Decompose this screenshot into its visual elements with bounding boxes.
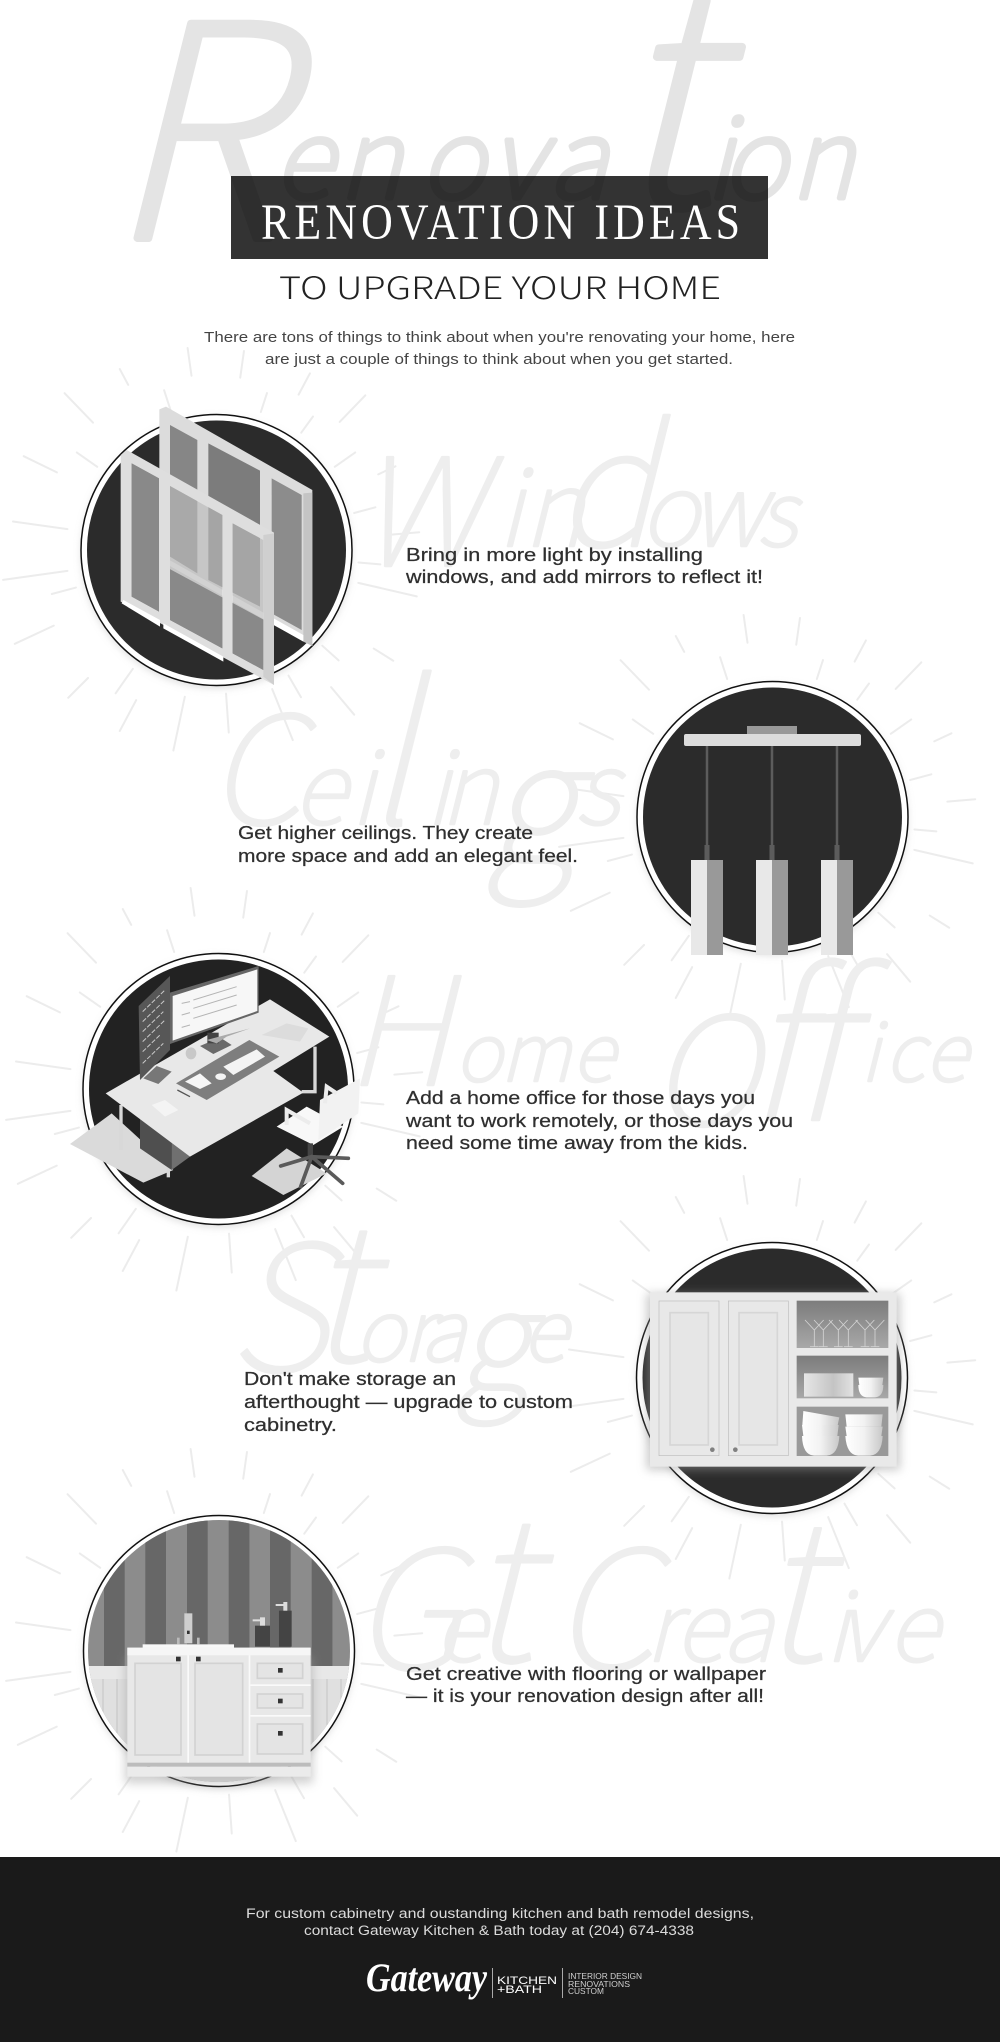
background script word: Renovation: i <box>705 70 743 230</box>
background script word: Renovation: o <box>420 70 491 230</box>
background script word: Windows: n <box>523 425 587 577</box>
background script word: Renovation: n <box>790 70 857 230</box>
body text: storage: Don't make storage an <box>244 1368 456 1389</box>
footer text <box>246 1906 754 1938</box>
subtitle: TO UPGRADE YOUR HOME <box>279 263 721 308</box>
icon: pendant light <box>684 726 861 955</box>
body text: ceilings <box>238 822 578 866</box>
panel: windows illustration <box>81 407 352 688</box>
logo: INTERIOR DESIGN <box>568 1971 642 1981</box>
background script word: Home Office: i <box>860 989 888 1105</box>
intro paragraph <box>204 329 795 368</box>
background script word: Renovation: o <box>722 70 793 230</box>
title text: RENOVATION IDEAS <box>261 195 740 251</box>
background script word: Get Creative: C <box>552 1478 671 1717</box>
background script word: Windows: W <box>355 393 504 610</box>
body text: storage: afterthought — upgrade to custom <box>244 1391 573 1412</box>
body text: get creative <box>406 1663 766 1706</box>
body text: home office: want to work remotely, or those days you <box>405 1110 793 1131</box>
panel: get creative illustration <box>84 1516 354 1790</box>
background script word: Home Office: f <box>790 888 891 1178</box>
footer panel <box>0 1857 1000 2042</box>
panel: home office illustration <box>70 954 360 1227</box>
logo <box>366 1955 642 2000</box>
logo: KITCHEN <box>497 1975 557 1987</box>
background script word: Windows: w <box>690 430 775 575</box>
background script word: Home Office: c <box>885 989 931 1105</box>
background script word: Home Office: o <box>455 989 506 1105</box>
background script word: Windows: o <box>640 430 704 575</box>
panel: storage illustration <box>636 1242 908 1516</box>
intro paragraph: There are tons of things to think about when you're renovating your home, here <box>204 329 795 346</box>
body text: get creative: Get creative with flooring or wallpaper <box>406 1663 766 1684</box>
body text: storage: cabinetry. <box>244 1414 337 1435</box>
icon: isometric desk with monitors and chair <box>70 966 360 1195</box>
background script word: Ceilings: e <box>293 708 353 853</box>
body text: get creative: — it is your renovation design after all! <box>406 1685 764 1706</box>
background script word: Ceilings: i <box>425 708 460 853</box>
background script word: Storage: r <box>402 1263 443 1386</box>
background script word: Renovation: a <box>548 70 610 230</box>
body text: windows <box>405 544 763 587</box>
icon: cabinet with dishes <box>647 1292 900 1470</box>
logo: RENOVATIONS <box>568 1979 630 1989</box>
title banner <box>231 176 768 259</box>
background script word: Storage: t <box>305 1141 389 1416</box>
background script word: Home Office: e <box>925 989 973 1105</box>
background script word: Home Office: O <box>650 952 771 1169</box>
background script word: Home Office: f <box>745 888 846 1178</box>
body text: windows: windows, and add mirrors to reflect it! <box>405 566 763 587</box>
icon: two isometric windows <box>121 407 312 685</box>
background script word: Storage: g <box>455 1229 545 1431</box>
background script word: Home Office: e <box>572 989 620 1105</box>
background script word: Get Creative: i <box>825 1552 858 1689</box>
background script word: Get Creative: G <box>352 1478 474 1717</box>
background script word: Storage: e <box>522 1263 573 1386</box>
background script word: Ceilings: n <box>440 708 501 853</box>
background script word: Get Creative: t <box>758 1436 844 1718</box>
icon: bathroom vanity <box>125 1602 313 1783</box>
wallpaper and wainscot inside circle <box>84 1516 354 1790</box>
background script word: Home Office: H <box>345 912 461 1129</box>
body text: home office <box>405 1087 793 1153</box>
footer text: For custom cabinetry and oustanding kitchen and bath remodel designs, <box>246 1906 754 1921</box>
body text: storage <box>244 1368 573 1435</box>
panel: ceilings illustration <box>637 682 908 955</box>
logo: +BATH <box>497 1984 542 1996</box>
body text: home office: need some time away from the kids. <box>406 1132 748 1153</box>
background script word: Storage: S <box>228 1169 344 1422</box>
background script word: Ceilings: l <box>365 600 431 880</box>
intro paragraph: are just a couple of things to think about when you get started. <box>265 351 733 368</box>
body text: home office: Add a home office for those days you <box>406 1087 755 1108</box>
background script word: Windows: i <box>497 425 533 577</box>
background script word: Get Creative: e <box>435 1552 492 1689</box>
background script word: Windows: d <box>556 355 670 594</box>
logo: CUSTOM <box>568 1986 604 1996</box>
background script word: Ceilings: i <box>350 708 385 853</box>
background script word: Storage: o <box>355 1263 410 1386</box>
background script word: Home Office: m <box>500 989 573 1105</box>
background script word: Ceilings: g <box>485 666 594 912</box>
background script word: Get Creative: e <box>675 1552 732 1689</box>
footer text: contact Gateway Kitchen & Bath today at (204) 674-4338 <box>304 1923 694 1938</box>
background script word: Ceilings: C <box>208 651 316 868</box>
background script word: Windows: s <box>757 442 802 572</box>
body text: ceilings: Get higher ceilings. They create <box>238 822 533 843</box>
background script word: Renovation: n <box>338 70 405 230</box>
background script word: Renovation: v <box>491 70 556 230</box>
background script word: Storage: a <box>420 1263 468 1386</box>
body text: ceilings: more space and add an elegant feel. <box>238 845 578 866</box>
background script word: Get Creative: t <box>465 1429 553 1719</box>
background script word: Get Creative: r <box>645 1552 691 1689</box>
logo: Gateway <box>366 1955 487 2000</box>
background script word: Get Creative: v <box>838 1552 894 1689</box>
background script word: Get Creative: e <box>888 1552 945 1689</box>
background script word: Renovation: e <box>274 70 340 230</box>
body text: windows: Bring in more light by installing <box>406 544 703 565</box>
background script word: Ceilings: s <box>575 708 625 853</box>
background script word: Get Creative: a <box>722 1552 776 1689</box>
